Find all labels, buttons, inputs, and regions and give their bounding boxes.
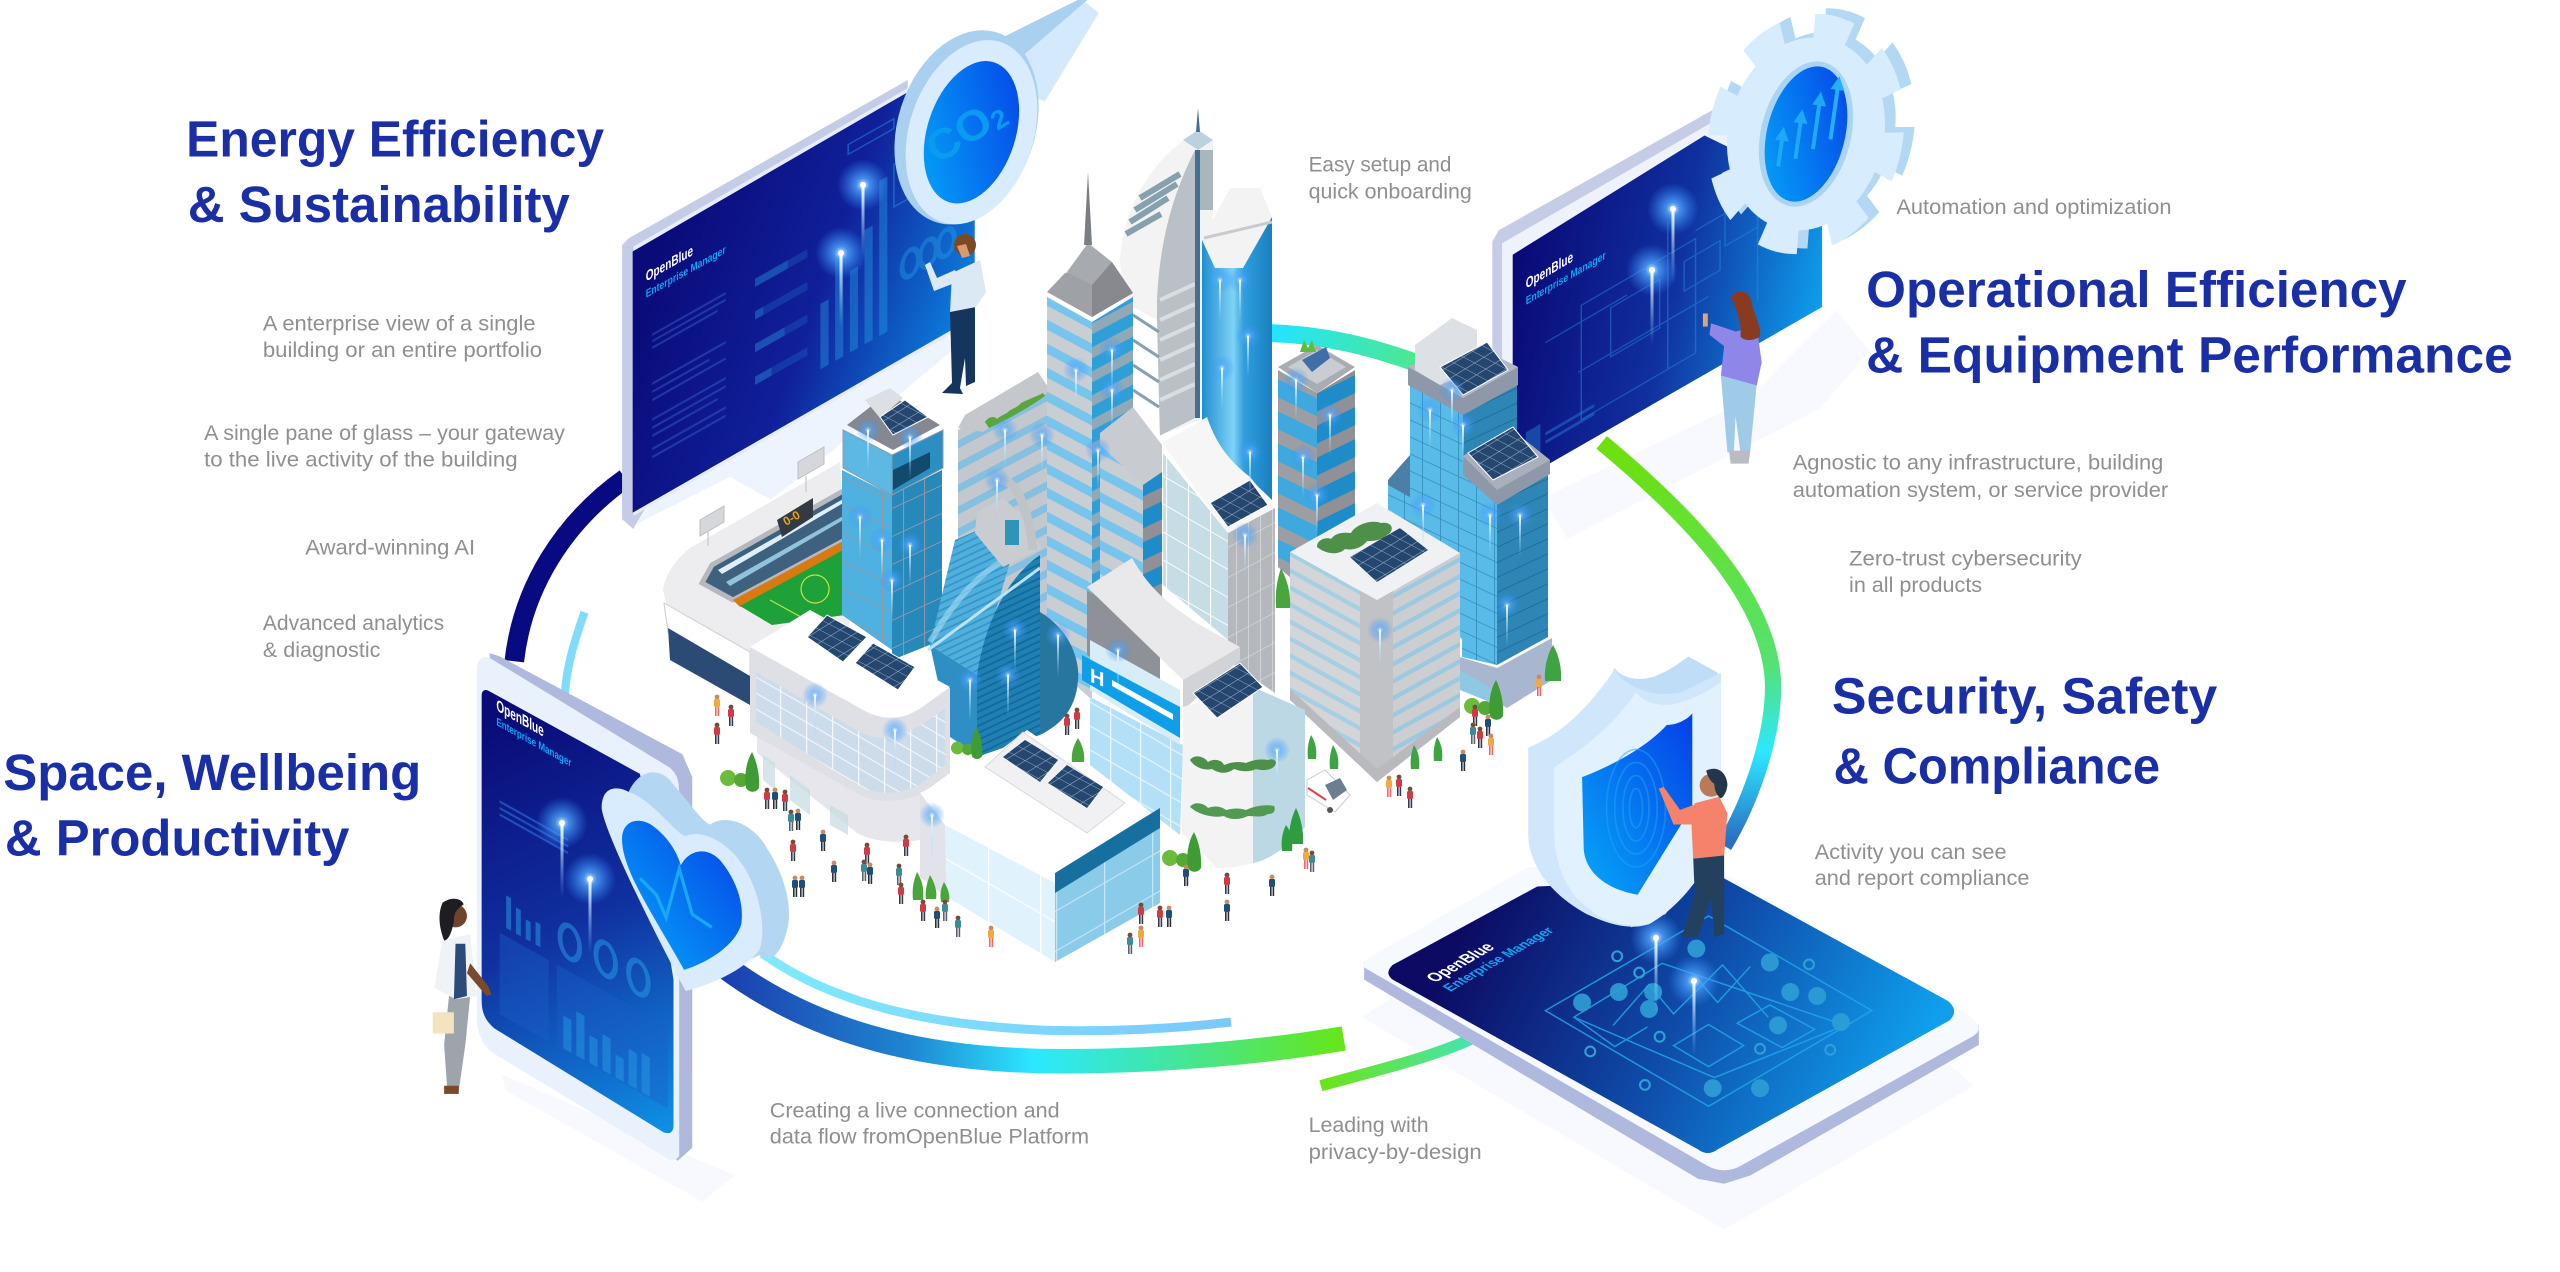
shield body [1528, 669, 1721, 927]
dashboard content: Enterprise Manager [646, 243, 726, 301]
figure: man at shield [1659, 769, 1727, 937]
text: activity: and report compliance [1815, 867, 2029, 890]
heading: space: Space, Wellbeing [3, 744, 421, 801]
tablet bezel [1363, 867, 1979, 1170]
tablet screen [1388, 878, 1954, 1153]
text: zero trust: in all products [1849, 574, 1982, 597]
arc: cyan to green top [1270, 333, 1424, 366]
stadium [663, 447, 850, 705]
panel: security tablet [1363, 867, 1979, 1184]
screen light beams [815, 159, 1699, 345]
tablet bezel [477, 657, 679, 1160]
dashboard content: OpenBlue [496, 695, 544, 741]
text: privacy: Leading with [1309, 1114, 1429, 1137]
hospital [1082, 558, 1240, 835]
heading: energy: Energy Efficiency [186, 111, 604, 168]
arc: thin light blue left [565, 612, 585, 694]
shield depth [1567, 656, 1721, 927]
logo: Enterprise Manager [1439, 924, 1558, 994]
text: single pane: A single pane of glass – your gateway [204, 422, 565, 445]
icon: CO2 lens [871, 0, 1099, 243]
logo: OpenBlue [1422, 940, 1499, 985]
panel: operations monitor [1492, 90, 1822, 490]
ambulance [1307, 770, 1350, 813]
heading: space: & Productivity [5, 810, 349, 867]
hospital: H [1090, 664, 1104, 692]
text: agnostic: automation system, or service provider [1793, 479, 2168, 502]
gear face [1698, 10, 1914, 258]
tablet light beams [536, 797, 616, 954]
logo [1422, 915, 1558, 994]
base [1460, 638, 1552, 708]
text: live connection: Creating a live connection and [770, 1099, 1060, 1122]
schematic content: Enterprise Manager [1526, 248, 1606, 308]
text: automation: Automation and optimization [1896, 196, 2171, 219]
dashboard content [646, 85, 954, 468]
text: analytics: Advanced analytics [263, 612, 444, 635]
text: analytics: & diagnostic [263, 639, 381, 662]
panel: wellbeing tablet [477, 653, 692, 1161]
security light beams [1630, 912, 1720, 1056]
people [714, 675, 1542, 954]
heart face [622, 821, 742, 970]
text: privacy: privacy-by-design [1309, 1141, 1482, 1164]
monitor screen [1513, 136, 1822, 473]
apartment block [1290, 503, 1460, 782]
shield face [1582, 713, 1692, 895]
tablet side [1364, 963, 1979, 1184]
text: easy setup: Easy setup and [1309, 153, 1451, 176]
stadium: 0-0 [780, 508, 803, 529]
connection rings [514, 333, 1773, 1086]
white curved building [750, 610, 950, 842]
dome building [928, 480, 1078, 757]
tablet side [490, 653, 692, 1161]
circuit board [1545, 916, 1872, 1106]
icon: gear with arrows [1698, 2, 1925, 260]
heading: energy: & Sustainability [188, 176, 570, 233]
dashboard content [496, 695, 668, 1108]
heading: operations: Operational Efficiency [1866, 261, 2407, 318]
figure: man at energy screen [925, 234, 986, 394]
planters [1190, 756, 1276, 773]
building light beams [802, 267, 1533, 857]
pulse line [640, 869, 712, 927]
city [663, 108, 1561, 962]
curved tower [1120, 108, 1213, 437]
text: easy setup: quick onboarding [1309, 181, 1472, 204]
upper tower [1410, 385, 1463, 640]
scoreboard [777, 498, 813, 537]
heart depth [629, 772, 789, 991]
floor shadows [501, 310, 1974, 1229]
text: enterprise view: A enterprise view of a single [263, 313, 536, 336]
CO2 label: CO [917, 99, 996, 173]
icon: heart [602, 772, 789, 991]
right curved building [1182, 663, 1305, 868]
side annex [1388, 455, 1410, 560]
front glass building [920, 730, 1160, 962]
fingerprint [1607, 749, 1665, 867]
blue tower with solar roof [842, 388, 943, 660]
arc: blue to green bottom [725, 967, 1344, 1061]
text: single pane: to the live activity of the building [204, 448, 518, 471]
arc: navy left [514, 478, 625, 661]
text: activity: Activity you can see [1815, 841, 2007, 864]
gear lens [1744, 51, 1868, 217]
panel: energy monitor [622, 80, 975, 529]
hospital sign [1082, 655, 1180, 738]
blue glass tower [1202, 188, 1272, 500]
text: award: Award-winning AI [305, 536, 475, 559]
growth arrows [1771, 68, 1846, 174]
text: live connection: data flow fromOpenBlue Platform [770, 1126, 1089, 1149]
text: zero trust: Zero-trust cybersecurity [1849, 548, 2082, 571]
heading: security: Security, Safety [1832, 667, 2217, 724]
trees [720, 568, 1561, 902]
figure: woman at operations screen [1703, 291, 1762, 464]
angular white building [1162, 417, 1275, 693]
arc: green to blue right [1602, 442, 1773, 846]
dashboard content: OpenBlue [646, 243, 693, 285]
arc: thin green bottom [1321, 1035, 1479, 1086]
monitor stand [633, 333, 953, 526]
front tower [1462, 470, 1497, 665]
monitor frame [1492, 90, 1749, 490]
right towers [1388, 318, 1552, 708]
figure: woman at tablet [433, 899, 491, 1094]
monitor frame [622, 80, 908, 529]
schematic content: OpenBlue [1526, 249, 1573, 292]
floodlights [700, 447, 824, 546]
lens handle [999, 0, 1099, 101]
tablet screen [482, 690, 673, 1133]
schematic content [1526, 142, 1758, 473]
dashboard content: Enterprise Manager [496, 715, 572, 770]
spire tower [1047, 172, 1162, 700]
heading: security: & Compliance [1834, 738, 2160, 795]
green roof tower [958, 372, 1048, 700]
text: agnostic: Agnostic to any infrastructure, building [1793, 452, 2163, 475]
text: enterprise view: building or an entire portfolio [263, 339, 542, 362]
icon: shield [1528, 656, 1721, 927]
CO2 label: 2 [985, 102, 1014, 136]
lens body [871, 11, 1063, 243]
monitor screen [633, 93, 975, 513]
heading: operations: & Equipment Performance [1866, 326, 2513, 383]
narrow tower [1278, 340, 1355, 600]
gear depth [1708, 4, 1925, 253]
heart body [602, 788, 762, 991]
arc: thin light blue bottom [762, 953, 1231, 1031]
